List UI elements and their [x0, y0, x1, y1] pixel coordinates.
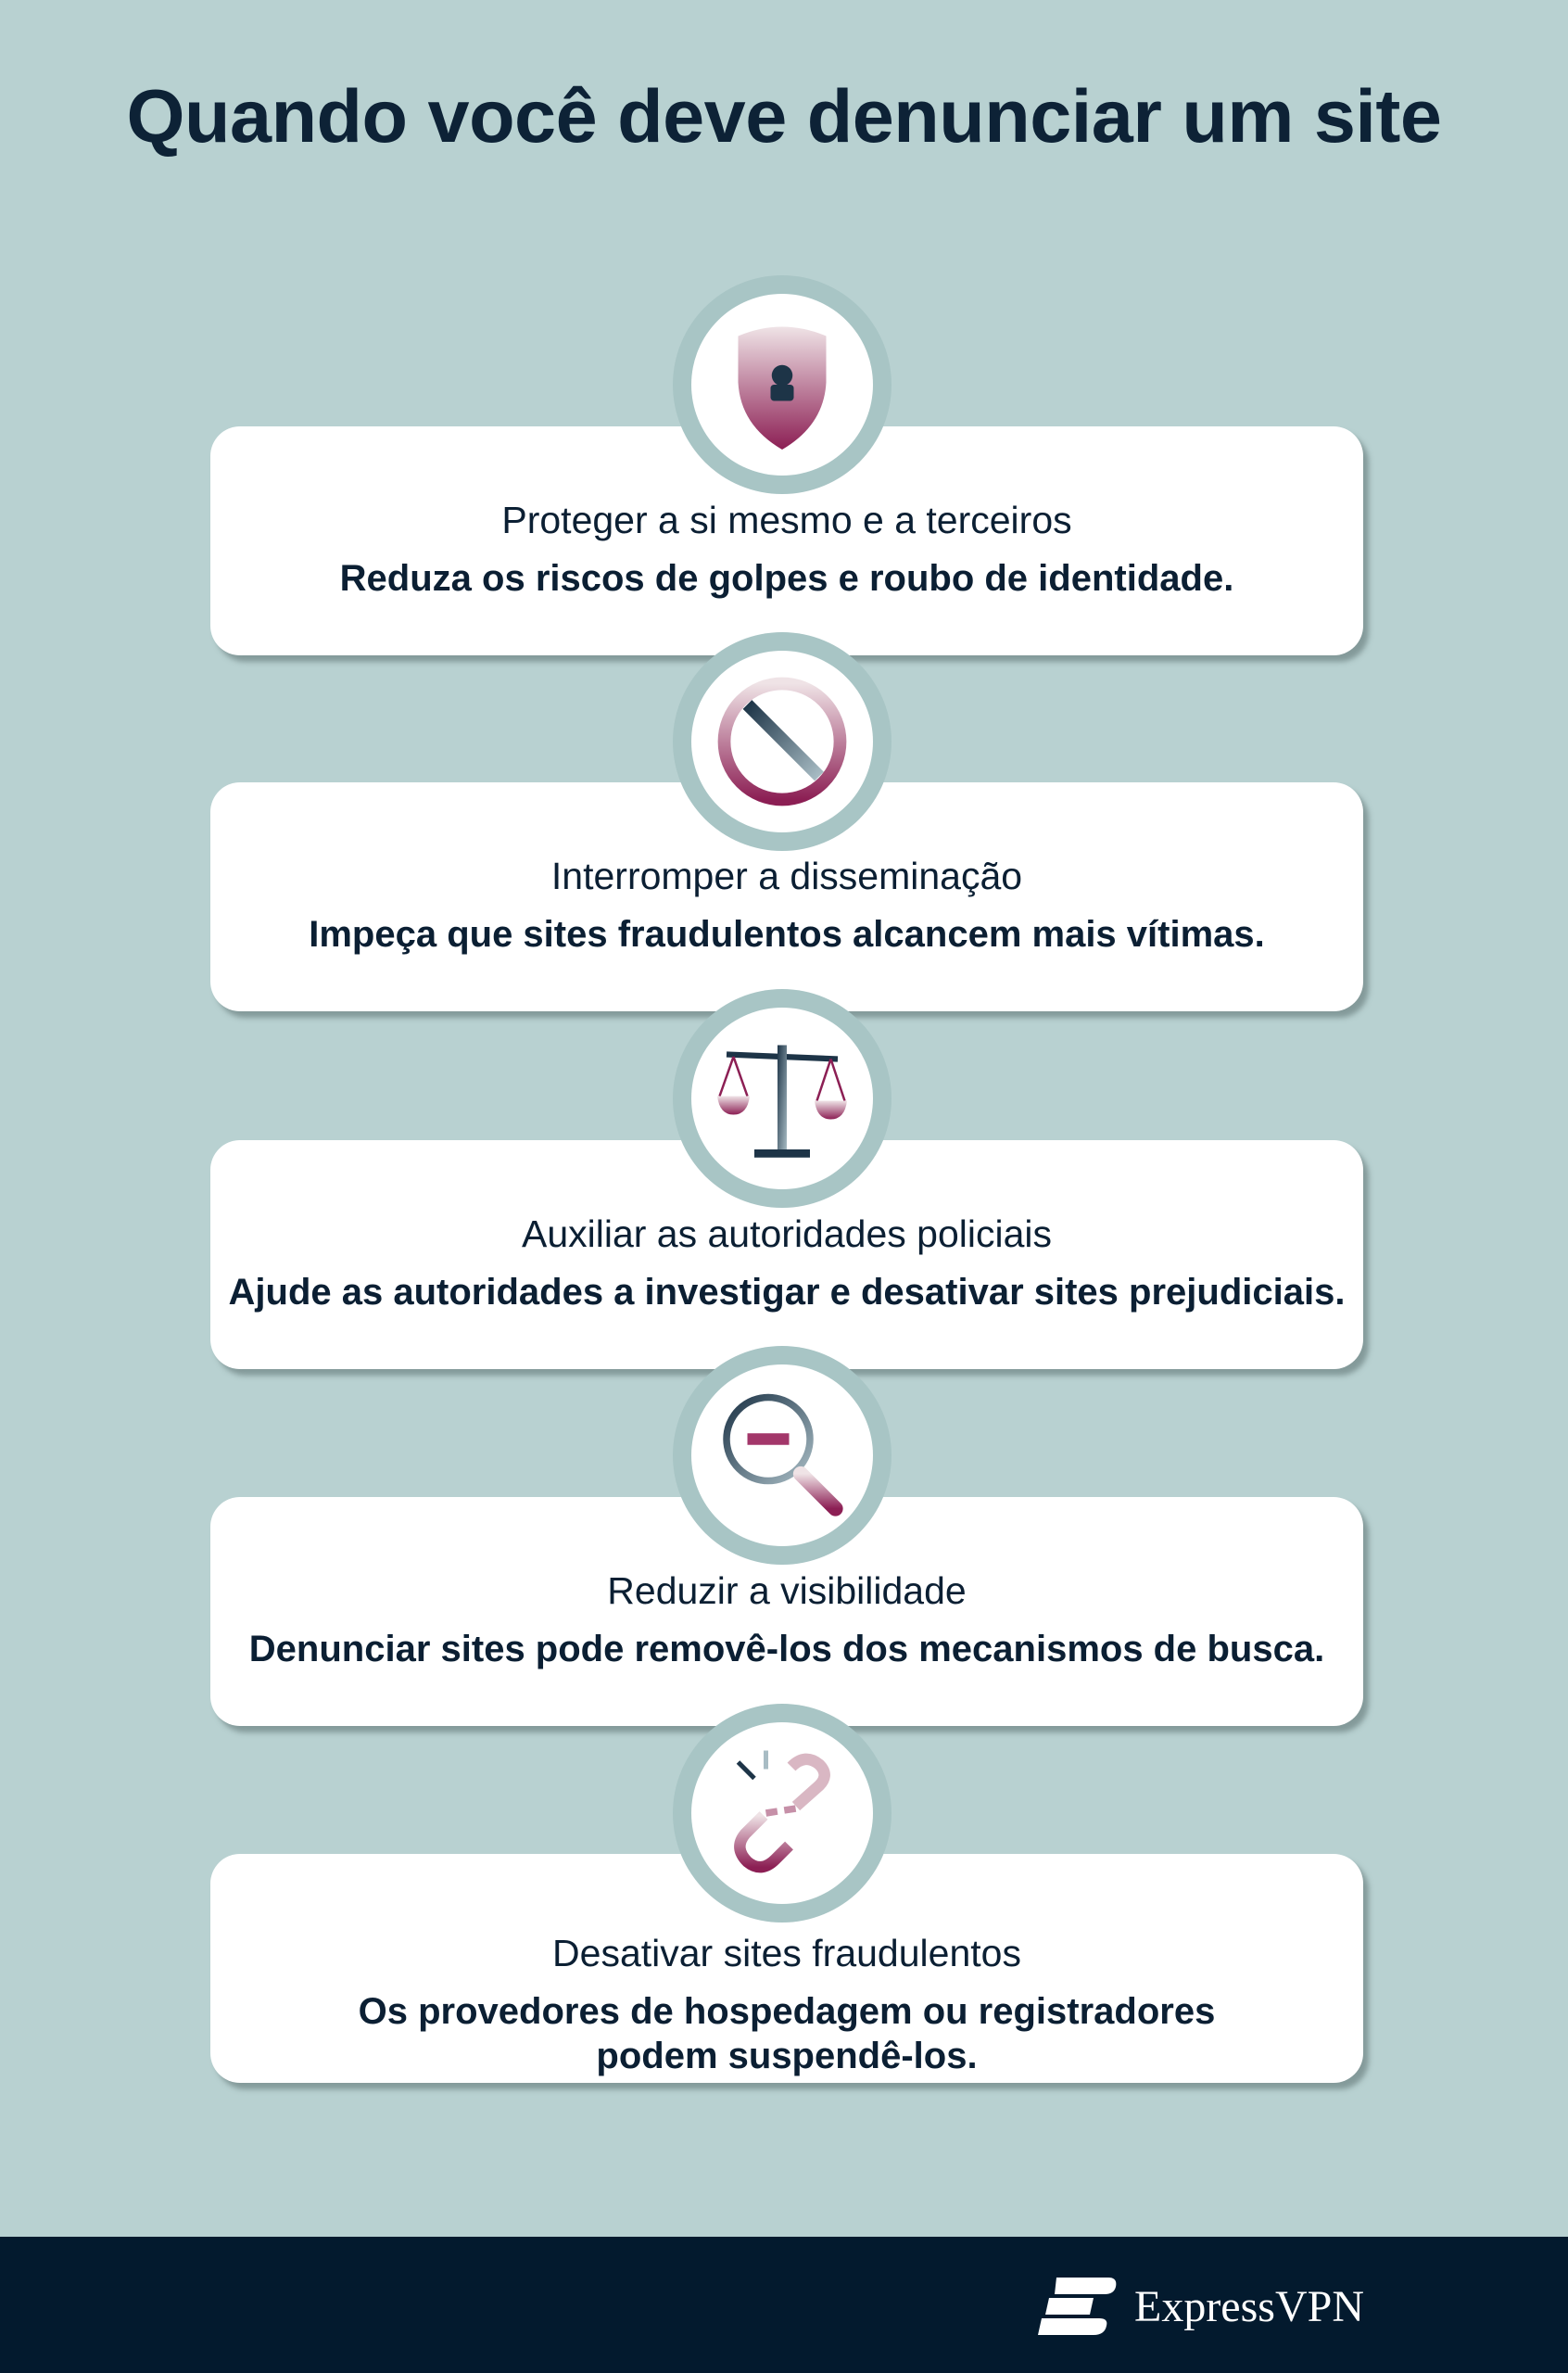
logo: ExpressVPN	[1038, 2278, 1364, 2335]
card 2: Interromper a disseminação	[551, 855, 1022, 897]
card 1	[210, 426, 1363, 655]
icon: prohibited	[673, 632, 891, 851]
card 1: Proteger a si mesmo e a terceiros	[501, 499, 1072, 541]
logo: ExpressVPN: ExpressVPN	[1134, 2282, 1364, 2331]
card 4	[210, 1497, 1363, 1726]
icon: magnifier	[673, 1346, 891, 1565]
card 4: Denunciar sites pode removê-los dos mecanismos de busca.	[249, 1629, 1324, 1669]
icon: shield	[673, 275, 891, 494]
title: Quando você deve denunciar um site	[127, 75, 1441, 159]
card 2	[210, 782, 1363, 1011]
card 5: Os provedores de hospedagem ou registradores	[359, 1991, 1215, 2032]
card 1: Reduza os riscos de golpes e roubo de identidade.	[340, 558, 1233, 599]
card 2: Impeça que sites fraudulentos alcancem mais vítimas.	[309, 914, 1265, 955]
card 3	[210, 1140, 1363, 1369]
footer	[0, 2237, 1568, 2373]
card 5: Desativar sites fraudulentos	[552, 1932, 1021, 1974]
card 5: podem suspendê-los.	[596, 2036, 978, 2076]
icon: scales	[673, 989, 891, 1208]
card 5	[210, 1854, 1363, 2083]
card 3: Ajude as autoridades a investigar e desativar sites prejudiciais.	[229, 1272, 1345, 1313]
card 4: Reduzir a visibilidade	[607, 1569, 967, 1612]
icon: broken link	[673, 1704, 891, 1923]
card 3: Auxiliar as autoridades policiais	[522, 1212, 1052, 1255]
